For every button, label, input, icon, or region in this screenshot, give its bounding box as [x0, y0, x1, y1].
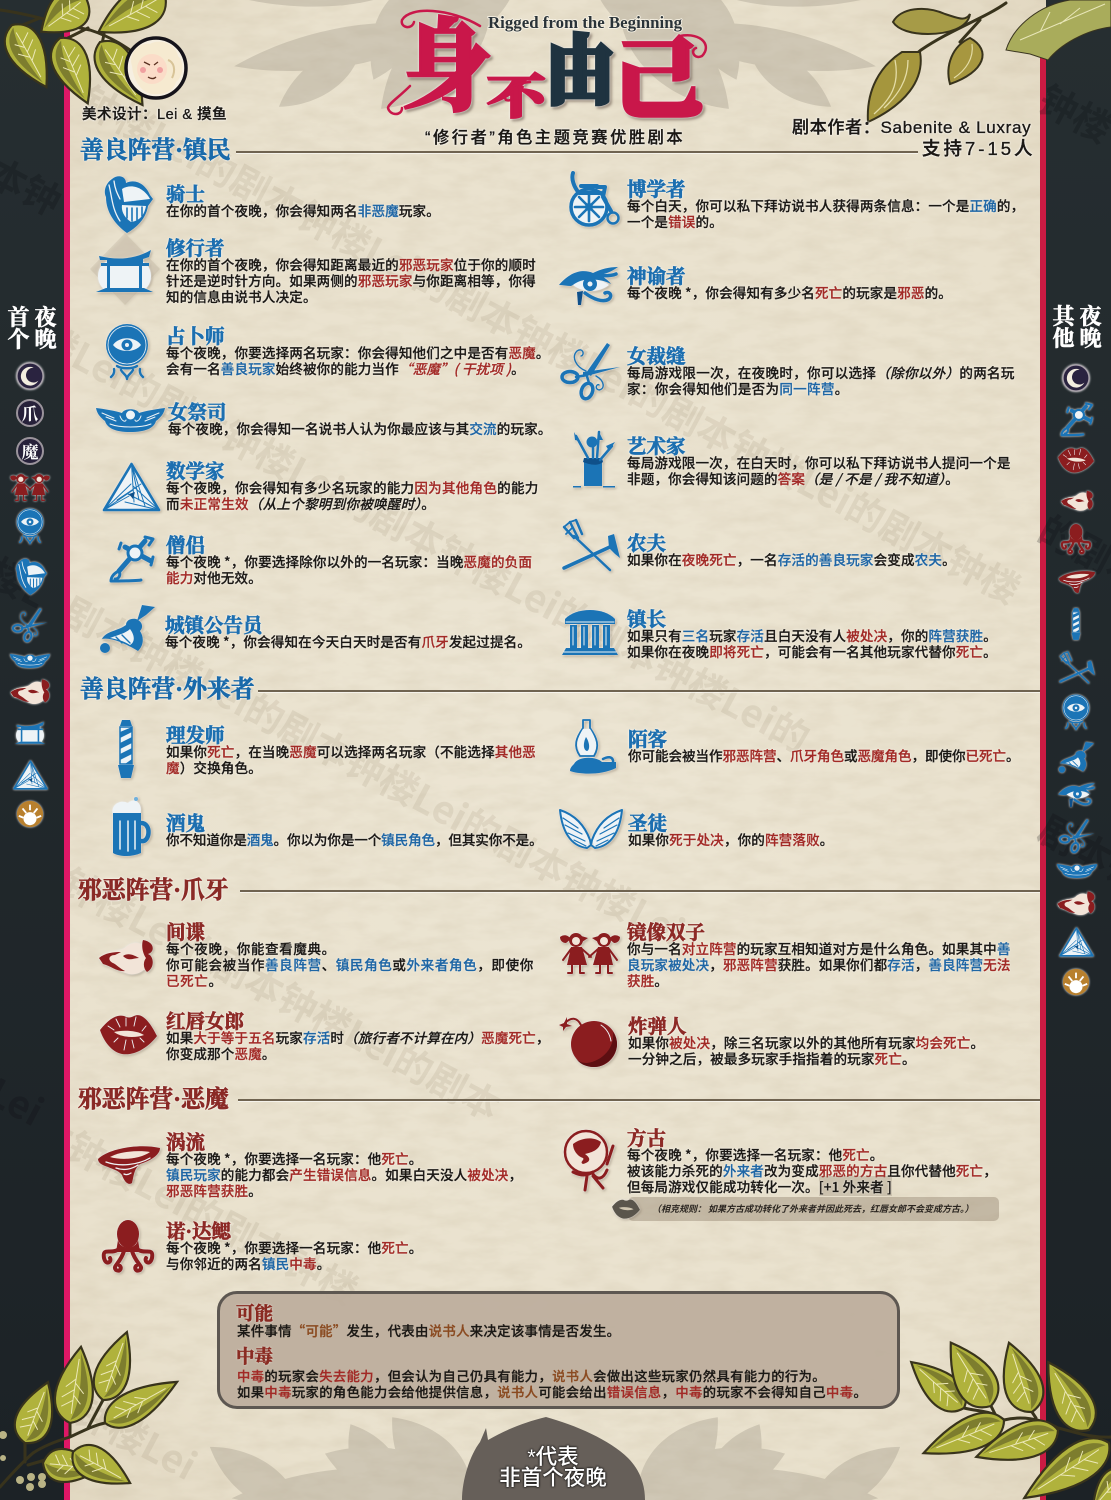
icon: barber	[1070, 608, 1082, 640]
icon: hand bell	[100, 604, 156, 656]
role: 修行者	[90, 234, 536, 306]
glossary: 中毒: 中毒	[236, 1348, 273, 1368]
role: 女祭司	[96, 401, 552, 438]
text: 酒鬼: 酒鬼	[166, 814, 205, 834]
role: 红唇女郎	[100, 1011, 547, 1061]
icon: bell	[1060, 742, 1094, 774]
title swirls	[388, 11, 706, 114]
text: 修行者	[166, 237, 536, 306]
icon: scissors	[12, 608, 48, 642]
text: 修行者: 针还是逆时针方向。如果两侧的邪恶玩家与你距离相等，你得	[166, 270, 536, 290]
glossary: 可能	[236, 1304, 620, 1338]
label: 其他夜晚: 晚	[1079, 326, 1102, 351]
text: 镇长: 镇长	[627, 610, 666, 630]
text: 博学者: 一个是错误的。	[627, 211, 723, 231]
text: 方古: 被该能力杀死的外来者改为变成邪恶的方古且你代替他死亡，	[627, 1160, 997, 1180]
text: 圣徒: 如果你死于处决，你的阵营落败。	[628, 829, 833, 849]
icon: lips	[1058, 446, 1094, 473]
jinx note	[628, 1197, 999, 1221]
text: 诺·达鳃	[166, 1221, 422, 1271]
text: 农夫: 农夫	[627, 534, 666, 554]
label: 首个夜晚: 首	[7, 305, 30, 330]
icon: monk staff	[109, 535, 157, 586]
text: 博学者	[627, 178, 1024, 231]
text: 数学家: 数学家	[166, 462, 225, 482]
icon: sun	[16, 800, 44, 828]
text: 酒鬼	[166, 813, 543, 847]
sidebar: other nights order	[1046, 300, 1111, 1000]
icon: crystal	[16, 508, 44, 544]
glossary: 中毒	[236, 1347, 867, 1399]
text: 涡流: 涡流	[166, 1132, 205, 1154]
text: 艺术家: 艺术家	[627, 436, 686, 458]
icon: crystal	[1062, 694, 1090, 730]
icon: triangle	[1059, 927, 1094, 957]
icon: minion 爪	[16, 399, 44, 427]
text: 女裁缝	[627, 345, 1015, 398]
icon: open book with hand	[97, 938, 155, 977]
icon: priestess	[1056, 864, 1098, 878]
role: 博学者	[569, 170, 1024, 231]
icon: vortex	[98, 1145, 160, 1185]
text: 占卜师: 每个夜晚，你要选择两名玩家：你会得知他们之中是否有恶魔。	[166, 342, 550, 362]
text: 理发师: 理发师	[166, 726, 225, 746]
icon: priestess	[9, 654, 51, 668]
role: 农夫	[562, 518, 956, 574]
text: 涡流: 邪恶阵营获胜。	[166, 1180, 262, 1200]
text: 诺·达鳃: 每个夜晚 *，你要选择一名玩家：他死亡。	[166, 1237, 422, 1257]
text: 方古: 方古	[627, 1128, 666, 1150]
text: 涡流: 镇民玩家的能力都会产生错误信息。如果白天没人被处决，	[166, 1164, 522, 1184]
text: 骑士: 骑士	[166, 184, 205, 206]
background: parchment, sidebars, ghost leaves, watermark: 钟楼Lei的剧本钟楼Lei的剧本钟楼Lei的剧本钟楼Lei的剧本钟楼	[73, 70, 1031, 615]
icon: temple	[562, 610, 620, 658]
text: 涡流: 每个夜晚 *，你要选择一名玩家：他死亡。	[166, 1148, 422, 1168]
icon: twin girls	[558, 932, 622, 975]
text: 理发师: 如果你死亡，在当晚恶魔可以选择两名玩家（不能选择其他恶	[166, 741, 536, 761]
icon: winged boat	[96, 408, 168, 435]
text: 艺术家	[627, 435, 1011, 488]
subtitle: Rigged from the Beginning: Rigged from the Beginning	[488, 13, 682, 32]
label: 首个夜晚: 个	[7, 327, 30, 352]
panel: glossary	[217, 1291, 900, 1409]
icon: monk	[1058, 402, 1094, 438]
role: 女裁缝	[560, 343, 1015, 403]
text: 红唇女郎	[166, 1011, 550, 1061]
role: 镜像双子	[558, 922, 1018, 988]
text: 农夫	[627, 532, 956, 569]
bottom mound	[462, 1417, 645, 1500]
text: 女祭司: 女祭司	[168, 402, 227, 424]
role: 炸弹人	[557, 1016, 982, 1068]
icon: bomb	[557, 1017, 618, 1067]
text: 女祭司	[168, 401, 552, 438]
text: 方古: 但每局游戏仅能成功转化一次。[+1 外来者 ]	[627, 1176, 892, 1196]
text: 镜像双子: 获胜。	[627, 970, 668, 990]
role: 涡流	[98, 1132, 523, 1198]
role: 神谕者	[559, 265, 952, 308]
subtitle chinese: “修行者”角色主题竞赛优胜剧本	[425, 129, 685, 147]
glossary: 可能: 可能	[236, 1305, 273, 1325]
text: 诺·达鳃: 与你邻近的两名镇民中毒。	[166, 1253, 330, 1273]
icon: spy	[1060, 486, 1094, 516]
icon: knight	[13, 558, 47, 595]
icon: spiral triangle	[102, 462, 162, 514]
text: 红唇女郎: 红唇女郎	[166, 1012, 244, 1032]
text: 炸弹人: 一分钟之后，被最多玩家手指指着的玩家死亡。	[628, 1048, 916, 1068]
sidebar: first night order	[0, 300, 64, 830]
role: 酒鬼	[108, 797, 538, 857]
icon: demon 魔: 魔	[22, 438, 38, 463]
icon: octopus	[98, 1220, 158, 1272]
role: 方古	[563, 1128, 1003, 1223]
label: 其他夜晚: 他	[1052, 326, 1074, 351]
text: 神谕者	[627, 265, 952, 302]
leaves: top left	[0, 0, 175, 115]
icon: small lips	[612, 1198, 640, 1219]
icon: torii	[15, 721, 45, 745]
text: 女祭司: 每个夜晚，你会得知一名说书人认为你最应该与其交流的玩家。	[168, 418, 552, 438]
text: 修行者: 修行者	[166, 238, 225, 260]
title characters: 己	[614, 11, 704, 136]
icon: moon	[1062, 364, 1090, 392]
player count: 支持7-15人	[922, 138, 1036, 159]
text: 炸弹人: 如果你被处决，除三名玩家以外的其他所有玩家均会死亡。	[628, 1032, 984, 1052]
icon: eye	[1058, 782, 1095, 807]
icon: fork	[1058, 652, 1096, 684]
icon: oil lamp	[570, 720, 616, 775]
text: 城镇公告员: 城镇公告员	[165, 616, 263, 636]
icon: octopus	[1058, 524, 1094, 554]
text: 艺术家: 每局游戏限一次，在白天时，你可以私下拜访说书人提问一个是	[627, 452, 1011, 472]
author credit: 剧本作者：Sabenite & Luxray	[792, 118, 1031, 137]
text: 间谍: 每个夜晚，你能查看魔典。	[166, 938, 336, 958]
label: 其他夜晚: 夜	[1079, 304, 1102, 329]
icon: spy	[9, 678, 51, 706]
glossary: 中毒: 中毒的玩家会失去能力，但会认为自己仍具有能力，说书人会做出这些玩家仍然具有能力的行为。	[237, 1366, 826, 1385]
role: 圣徒	[560, 810, 830, 852]
text: 城镇公告员	[164, 614, 531, 651]
text: 间谍: 间谍	[166, 922, 205, 944]
text: 农夫: 如果你在夜晚死亡，一名存活的善良玩家会变成农夫。	[627, 549, 956, 569]
heading: 邪恶阵营·爪牙: 邪恶阵营·爪牙	[78, 878, 229, 904]
role: 理发师	[115, 720, 540, 778]
icon: spy	[1056, 890, 1096, 917]
icon: demon 魔	[16, 437, 44, 465]
icon: crossed tools	[562, 518, 622, 574]
role: 镇长	[562, 608, 997, 661]
text: 占卜师: 会有一名善良玩家始终被你的能力当作“恶魔”( 干扰项 )。	[166, 358, 525, 378]
text: 修行者: 知的信息由说书人决定。	[166, 286, 317, 306]
text: 僧侣	[166, 534, 532, 587]
text: 陌客: 陌客	[628, 730, 667, 750]
text: 方古	[627, 1128, 997, 1193]
text: 陌客	[628, 729, 1019, 763]
icon: barber pole	[115, 720, 137, 778]
icon: knight helmet	[104, 176, 155, 236]
text: 陌客: 你可能会被当作邪恶阵营、爪牙角色或恶魔角色，即使你已死亡。	[628, 745, 1019, 765]
icon: wheelchair	[569, 170, 622, 230]
icon: brushes in pot	[573, 430, 617, 490]
role: 占卜师	[106, 324, 550, 382]
leaves: top right with buds	[868, 0, 1111, 122]
title characters	[402, 0, 704, 136]
role: 陌客	[570, 720, 1015, 775]
text: 炸弹人	[628, 1016, 984, 1066]
icon: torii gate	[90, 234, 160, 305]
glossary: 可能: 某件事情“可能”发生，代表由说书人来决定该事情是否发生。	[237, 1320, 620, 1340]
icon: eye of horus	[559, 267, 620, 308]
text: 间谍: 你可能会被当作善良阵营、镇民角色或外来者角色，即使你	[166, 954, 534, 974]
text: 数学家: 每个夜晚，你会得知有多少名玩家的能力因为其他角色的能力	[166, 477, 539, 497]
role: 间谍	[97, 922, 537, 988]
heading: 邪恶阵营·恶魔: 邪恶阵营·恶魔	[78, 1087, 229, 1113]
text: 间谍	[166, 922, 534, 987]
text: 理发师: 魔）交换角色。	[166, 757, 262, 777]
label: 其他夜晚: 其	[1052, 304, 1074, 329]
label: 首个夜晚	[7, 307, 59, 351]
title characters: 不	[487, 60, 549, 127]
footnote: star meaning: *代表	[527, 1445, 579, 1469]
icon: minion 爪: 爪	[22, 400, 38, 425]
role: 僧侣	[109, 534, 532, 587]
icon: angel wings	[560, 810, 622, 852]
text: 僧侣: 每个夜晚 *，你要选择除你以外的一名玩家：当晚恶魔的负面	[166, 551, 532, 571]
text: 镜像双子	[627, 922, 1011, 987]
text: 博学者: 每个白天，你可以私下拜访说书人获得两条信息：一个是正确的，	[627, 195, 1024, 215]
role: 数学家	[102, 460, 539, 514]
text: 间谍: 已死亡。	[166, 970, 223, 990]
label: 其他夜晚	[1052, 306, 1104, 350]
icon: sun	[1062, 968, 1090, 996]
text: 数学家	[166, 460, 539, 513]
text: 城镇公告员: 每个夜晚 *，你会得知在今天白天时是否有爪牙发起过提名。	[165, 631, 531, 651]
icon: vortex	[1059, 570, 1095, 594]
text: 数学家: 而未正常生效（从上个黎明到你被唤醒时）。	[166, 493, 435, 513]
text: 红唇女郎: 如果大于等于五名玩家存活时（旅行者不计算在内）恶魔死亡，	[166, 1027, 550, 1047]
role: 诺·达鳃	[98, 1220, 418, 1272]
text: 艺术家: 非题，你会得知该问题的答案（是 / 不是 / 我不知道）。	[627, 468, 959, 488]
text: 圣徒: 圣徒	[628, 814, 667, 834]
text: 神谕者: 神谕者	[627, 266, 686, 288]
text: 骑士: 在你的首个夜晚，你会得知两名非恶魔玩家。	[166, 200, 440, 220]
text: 圣徒	[628, 813, 833, 847]
text: 僧侣: 僧侣	[166, 536, 205, 556]
text: 占卜师: 占卜师	[166, 326, 225, 348]
text: 女裁缝: 女裁缝	[627, 346, 686, 368]
jinx note: （相克规则： 如果方古成功转化了外来者并因此死去，红唇女郎不会变成方古。）	[652, 1202, 974, 1215]
icon: moon	[16, 362, 44, 390]
text: 理发师	[166, 725, 536, 775]
glossary: 中毒: 如果中毒玩家的角色能力会给他提供信息，说书人可能会给出错误信息，中毒的玩家不会得知自己中毒。	[237, 1382, 867, 1401]
role: 艺术家	[573, 430, 1011, 490]
text: 酒鬼: 你不知道你是酒鬼。你以为你是一个镇民角色，但其实你不是。	[166, 829, 543, 849]
text: 僧侣: 能力对他无效。	[166, 567, 262, 587]
icon: red lips	[100, 1012, 157, 1055]
footnote: star meaning: 非首个夜晚	[499, 1466, 607, 1490]
icon: fang gu orb	[563, 1130, 617, 1192]
text: 博学者: 博学者	[627, 180, 686, 200]
icon: twins	[9, 473, 51, 502]
title characters: 由	[546, 10, 614, 119]
icon: beer mug	[108, 797, 150, 857]
avatar	[124, 36, 188, 100]
role: 骑士	[104, 176, 440, 236]
text: 方古: 每个夜晚 *，你要选择一名玩家：他死亡。	[627, 1144, 883, 1164]
text: 镜像双子: 良玩家被处决，邪恶阵营获胜。如果你们都存活，善良阵营无法	[627, 954, 1011, 974]
art credit: 美术设计：Lei & 摸鱼	[82, 107, 227, 123]
label: 首个夜晚: 晚	[34, 327, 56, 352]
label: 首个夜晚: 夜	[34, 305, 56, 330]
text: 占卜师	[166, 325, 550, 378]
leaves: bottom right	[900, 1332, 1111, 1500]
text: 神谕者: 每个夜晚 *，你会得知有多少名死亡的玩家是邪恶的。	[627, 282, 952, 302]
heading: 善良阵营·镇民: 善良阵营·镇民	[80, 138, 231, 164]
text: 诺·达鳃: 诺·达鳃	[166, 1222, 231, 1242]
title logo: 身不由己	[386, 0, 708, 136]
role: 城镇公告员	[100, 604, 531, 656]
text: 修行者: 在你的首个夜晚，你会得知距离最近的邪恶玩家位于你的顺时	[166, 254, 536, 274]
text: 女裁缝: 每局游戏限一次，在夜晚时，你可以选择（除你以外）的两名玩	[627, 362, 1015, 382]
text: 镇长	[627, 609, 997, 659]
footnote: star meaning	[493, 1447, 613, 1489]
text: 涡流	[166, 1132, 522, 1197]
text: 镇长: 如果你在夜晚即将死亡，可能会有一名其他玩家代替你死亡。	[627, 641, 997, 661]
icon: triangle	[13, 760, 48, 790]
text: 骑士	[166, 183, 440, 220]
leaves: bottom left	[0, 1327, 185, 1498]
text: 红唇女郎: 你变成那个恶魔。	[166, 1043, 276, 1063]
icon: scissors	[1059, 819, 1095, 853]
text: 女裁缝: 家：你会得知他们是否为同一阵营。	[627, 378, 849, 398]
text: 镜像双子: 镜像双子	[627, 922, 705, 944]
text: 镇长: 如果只有三名玩家存活且白天没有人被处决，你的阵营获胜。	[627, 625, 997, 645]
text: 炸弹人: 炸弹人	[628, 1016, 687, 1038]
icon: scissors	[560, 343, 620, 403]
text: 镜像双子: 你与一名对立阵营的玩家互相知道对方是什么角色。如果其中善	[627, 938, 1011, 958]
heading: 善良阵营·外来者: 善良阵营·外来者	[80, 677, 255, 703]
icon: crystal ball	[106, 324, 151, 382]
